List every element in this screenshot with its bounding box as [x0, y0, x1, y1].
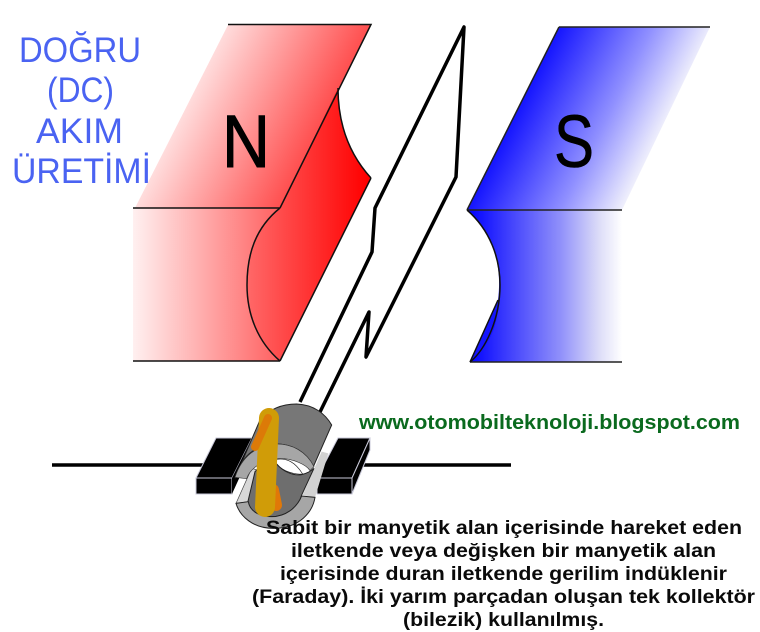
right contact strip — [303, 452, 328, 497]
orange wire ends — [273, 490, 276, 505]
orange wire overlay — [255, 418, 268, 447]
left brush — [196, 438, 252, 494]
axle — [52, 463, 511, 467]
description text: (Faraday). İki yarım parçadan oluşan tek kollektör — [252, 587, 756, 608]
S magnet — [467, 27, 710, 362]
website url: www.otomobilteknoloji.blogspot.com — [358, 411, 740, 434]
commutator and brushes — [196, 404, 370, 528]
description text: iletkende veya değişken bir manyetik alan — [291, 541, 716, 562]
commutator segments — [235, 404, 332, 528]
lower segment outer surface — [248, 463, 314, 517]
N magnet — [133, 24, 371, 361]
gold wire — [265, 418, 269, 507]
title — [12, 31, 151, 191]
description text: Sabit bir manyetik alan içerisinde hareket eden — [266, 518, 742, 539]
label: S: S — [554, 100, 594, 183]
right brush — [317, 438, 370, 494]
left contact strip — [236, 468, 257, 503]
label: N: N — [222, 100, 270, 183]
title: DOĞRU — [19, 31, 141, 70]
conductor loop — [300, 27, 464, 412]
title: (DC) — [47, 71, 114, 110]
title: ÜRETİMİ — [12, 152, 151, 191]
description text: içerisinde duran iletkende gerilim indüklenir — [280, 564, 728, 585]
lower segment rim — [236, 496, 315, 528]
centre opening — [277, 459, 303, 474]
upper segment outer surface — [235, 404, 332, 478]
description text: (bilezik) kullanılmış. — [403, 610, 604, 631]
description text — [252, 518, 756, 631]
upper segment rim — [235, 444, 314, 479]
title: AKIM — [36, 112, 123, 151]
